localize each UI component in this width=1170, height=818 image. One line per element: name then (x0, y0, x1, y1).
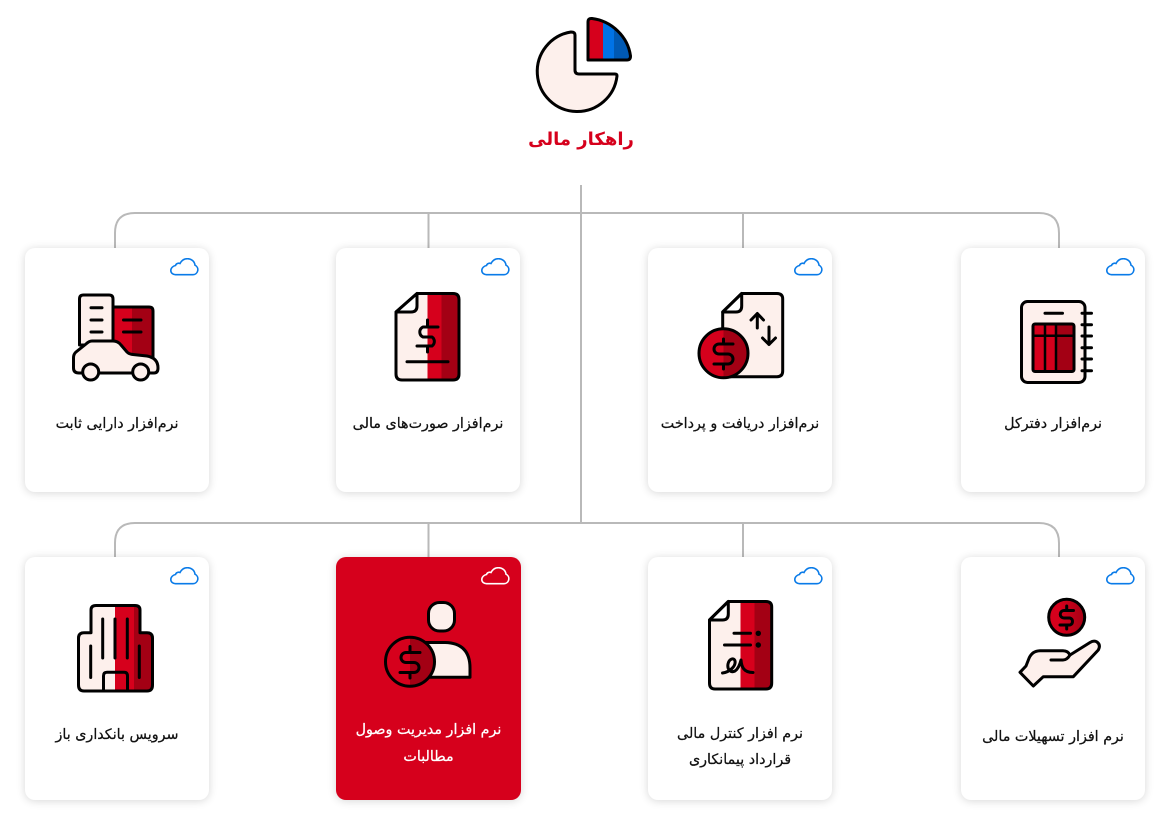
icon: payment document and coin (698, 292, 784, 380)
panel: contract control software (648, 557, 832, 800)
icon: cloud (1106, 567, 1135, 584)
icon: cloud (481, 567, 510, 584)
label: نرم افزار کنترل مالی (677, 726, 803, 742)
label: سرویس بانکداری باز (55, 727, 179, 743)
label (677, 726, 803, 768)
label: نرم‌افزار صورت‌های مالی (353, 416, 503, 432)
label: نرم‌افزار دارایی ثابت (56, 416, 178, 432)
label: نرم‌افزار دریافت و پرداخت (661, 416, 819, 432)
title: راهکار مالی (528, 129, 634, 150)
icon: cloud (170, 258, 199, 276)
icon: pie chart (536, 17, 632, 113)
panel: receive and pay software (648, 248, 832, 492)
icon: hand with coin (1018, 598, 1101, 688)
panel: fixed assets software (25, 248, 209, 492)
icon: cloud (794, 258, 823, 276)
icon: dollar document (394, 292, 460, 382)
label: قرارداد پیمانکاری (689, 752, 791, 768)
icon: ledger notebook (1020, 300, 1093, 384)
icon: bank building (77, 604, 154, 692)
label: مطالبات (403, 749, 454, 765)
label: نرم افزار مدیریت وصول (356, 722, 501, 738)
panel: ledger software (961, 248, 1145, 492)
label: نرم افزار تسهیلات مالی (982, 729, 1124, 745)
panel: financial facilities software (961, 557, 1145, 800)
icon: cloud (481, 258, 510, 276)
icon: cloud (1106, 258, 1135, 276)
panel: financial statements software (336, 248, 520, 492)
panel: receivables management software (336, 557, 521, 800)
label (356, 722, 501, 765)
panel: open banking service (25, 557, 209, 800)
icon: signed contract (708, 600, 774, 690)
icon: cloud (170, 567, 199, 584)
icon: cloud (794, 567, 823, 584)
icon: person with coin (384, 601, 472, 688)
label: نرم‌افزار دفترکل (1004, 416, 1102, 432)
icon: building and car (72, 294, 160, 382)
